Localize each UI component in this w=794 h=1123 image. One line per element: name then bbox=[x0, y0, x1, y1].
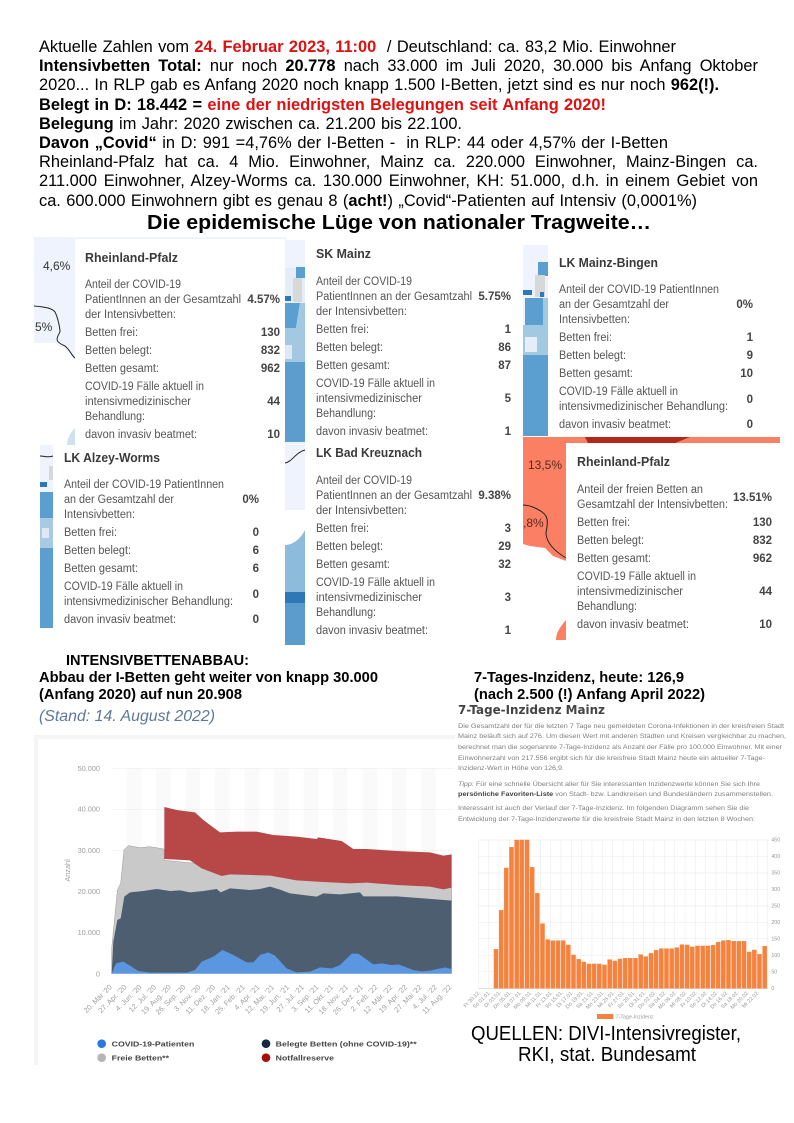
table rows: 1 bbox=[505, 426, 512, 438]
panel heading: Rheinland-Pfalz bbox=[577, 455, 670, 469]
heading: Intensivbettenabbau: Abbau der I-Betten geht weiter von knapp 30.000 bbox=[39, 670, 378, 686]
table rows: 5.75% bbox=[478, 291, 511, 303]
table rows: 29 bbox=[498, 541, 511, 553]
x axis labels: Sa 04.02. bbox=[648, 990, 668, 1010]
intro text block: Aktuelle Zahlen vom 24. Februar 2023, 11:00 / Deutschland: ca. 83,2 Mio. Einwohner bbox=[39, 38, 676, 56]
table rows: Betten frei: bbox=[577, 517, 630, 529]
table rows: 4.57% bbox=[247, 294, 280, 306]
note: status date: (Stand: 14. August 2022) bbox=[39, 708, 215, 725]
table rows: 1 bbox=[505, 625, 512, 637]
x axis labels: Mo 06.02. bbox=[657, 990, 678, 1011]
paragraphs: Tipp: Für eine schnelle Übersicht aller für Sie interessanten Inzidenzwerte können Sie sich Ihre bbox=[458, 781, 761, 788]
table rows: Betten belegt: bbox=[64, 545, 131, 557]
y axis labels: 400 bbox=[771, 854, 780, 860]
table rows: Betten belegt: bbox=[85, 345, 152, 357]
table rows: Betten belegt: bbox=[316, 342, 383, 354]
x axis labels: 19. Jun. '21 bbox=[258, 983, 291, 1016]
table rows: Betten gesamt: bbox=[316, 360, 390, 372]
bars bbox=[494, 840, 767, 988]
table rows: Betten frei: bbox=[64, 527, 117, 539]
x axis labels: 11. Okt. '21 bbox=[303, 983, 335, 1015]
y axis labels: 300 bbox=[771, 887, 780, 893]
y axis labels: 150 bbox=[771, 936, 780, 942]
table rows: davon invasiv beatmet: bbox=[316, 625, 428, 637]
y axis labels bbox=[63, 764, 100, 978]
table rows: Betten frei: bbox=[559, 332, 612, 344]
paragraphs: Entwicklung der 7-Tage-Inzidenzwerte für die kreisfreie Stadt Mainz in den letzten 8 Wochen: bbox=[458, 817, 755, 823]
y axis labels: 450 bbox=[771, 838, 780, 844]
table rows: 1 bbox=[505, 324, 512, 336]
table rows: 10 bbox=[740, 368, 753, 380]
x axis labels: Sa 21.01. bbox=[575, 990, 596, 1010]
heading: 7-Tages-Inzidenz today bbox=[474, 670, 705, 703]
y axis labels: 50.000 bbox=[78, 764, 100, 773]
y axis labels bbox=[771, 838, 780, 992]
table rows: 44 bbox=[759, 586, 773, 598]
panel: Rheinland-Pfalz free beds bbox=[566, 443, 780, 640]
table rows bbox=[316, 475, 512, 637]
table rows: Betten belegt: bbox=[577, 535, 644, 547]
title: Die epidemische Lüge von nationaler Tragweite… bbox=[147, 211, 651, 234]
x axis labels: Mi 08.02. bbox=[669, 990, 689, 1010]
table rows: an der Gesamtzahl der bbox=[559, 299, 669, 311]
intro text block: 211.000 Einwohner, Alzey-Worms ca. 130.000 Einwohner, KH: 51.000, d.h. in einem Gebiet von bbox=[39, 172, 758, 190]
table rows: PatientInnen an der Gesamtzahl bbox=[85, 294, 241, 306]
table rows: Betten gesamt: bbox=[316, 559, 390, 571]
x axis labels: 12. Mai. '21 bbox=[243, 983, 276, 1016]
x axis labels: Sa 07.01. bbox=[503, 990, 523, 1010]
panel heading: LK Mainz-Bingen bbox=[559, 256, 658, 270]
table rows bbox=[85, 279, 281, 441]
intro text block: ca. 600.000 Einwohnern gibt es genau 8 (acht!) „Covid“-Patienten auf Intensiv (0,0001%) bbox=[39, 192, 697, 210]
y axis labels: 0 bbox=[96, 969, 100, 978]
table rows: der Intensivbetten: bbox=[316, 306, 407, 318]
table rows bbox=[64, 479, 259, 626]
table rows: 832 bbox=[261, 345, 280, 357]
series: COVID-19 patients bbox=[112, 950, 452, 974]
table rows: 32 bbox=[498, 559, 511, 571]
x axis labels: 3. Nov. '20 bbox=[172, 983, 202, 1013]
x axis labels: 18. Nov. '21 bbox=[317, 983, 350, 1016]
table rows: 962 bbox=[261, 363, 280, 375]
x axis labels: So 01.01. bbox=[472, 990, 492, 1010]
sources: QUELLEN: DIVI-Intensivregister, bbox=[471, 1023, 741, 1045]
table rows: 962 bbox=[753, 553, 772, 565]
x axis labels: Mi 11.01. bbox=[525, 990, 544, 1009]
panel heading: LK Alzey-Worms bbox=[64, 451, 160, 465]
paragraphs: Einwohnerzahl von 217.556 ergibt sich für die kreisfreie Stadt Mainz heute ein aktueller 7-Tage- bbox=[458, 756, 765, 762]
y axis labels: 200 bbox=[771, 920, 780, 926]
x axis labels: So 29.01. bbox=[617, 990, 637, 1010]
table rows bbox=[577, 484, 773, 631]
y axis labels: 0 bbox=[771, 986, 774, 992]
x axis labels: 12. Mär. '22 bbox=[361, 983, 394, 1016]
heading: 7-Tages-Inzidenz today: (nach 2.500 (!) Anfang April 2022) bbox=[474, 687, 705, 703]
block heading: 7-Tage-Inzidenz Mainz bbox=[458, 702, 605, 717]
table rows: PatientInnen an der Gesamtzahl bbox=[316, 490, 472, 502]
x axis labels: 4. Apr. '21 bbox=[232, 983, 261, 1012]
x axis labels: 27. Jul. '21 bbox=[274, 983, 306, 1014]
table rows: 9 bbox=[747, 350, 753, 362]
table rows: Betten frei: bbox=[316, 523, 369, 535]
table rows: 0 bbox=[747, 394, 753, 406]
table rows: COVID-19 Fälle aktuell in bbox=[85, 381, 204, 393]
table rows: der Intensivbetten: bbox=[316, 505, 407, 517]
table rows: Betten frei: bbox=[85, 327, 138, 339]
x axis labels: Mo 20.02. bbox=[730, 990, 751, 1011]
table rows: Anteil der COVID-19 PatientInnen bbox=[64, 479, 224, 491]
x axis labels: 12. Jul. '20 bbox=[127, 983, 158, 1014]
x axis labels: 27. Apr. '20 bbox=[96, 983, 128, 1015]
y axis labels: Anzahl bbox=[63, 859, 72, 882]
x axis labels: 3. Sep. '21 bbox=[289, 983, 320, 1014]
map fragment: Rheinland-Pfalz pale blue: 5% bbox=[35, 320, 53, 334]
table rows: 130 bbox=[753, 517, 772, 529]
table rows: 0 bbox=[747, 419, 753, 431]
x axis labels: Mo 09.01. bbox=[513, 990, 534, 1011]
x axis labels: Sa 18.02. bbox=[720, 990, 740, 1010]
y axis labels: 250 bbox=[771, 904, 780, 910]
legend: COVID-19-Patienten bbox=[112, 1042, 194, 1049]
x axis labels: Do 02.02. bbox=[637, 990, 658, 1010]
panel: SK Mainz bbox=[305, 240, 522, 440]
legend: Notfallreserve bbox=[276, 1056, 334, 1063]
y axis labels: 10.000 bbox=[78, 928, 100, 937]
table rows bbox=[559, 284, 754, 431]
table rows: Intensivbetten: bbox=[64, 509, 135, 521]
legend bbox=[97, 1039, 417, 1063]
paragraphs: Mainz beläuft sich auf 276. Um diesen Wert mit anderen Städten und Kreisen vergleichbar zu machen, bbox=[458, 734, 786, 740]
background stripes bbox=[126, 768, 436, 974]
x axis labels: 2. Feb. '22 bbox=[349, 983, 379, 1013]
x axis labels: 19. Aug. '20 bbox=[139, 983, 173, 1016]
x axis labels bbox=[82, 983, 453, 1017]
heading: Intensivbettenabbau: (Anfang 2020) auf nun 20.908 bbox=[39, 687, 242, 703]
table rows: 86 bbox=[498, 342, 511, 354]
table rows: davon invasiv beatmet: bbox=[577, 619, 689, 631]
x axis labels: Mi 22.02. bbox=[741, 990, 761, 1010]
chart: ICU beds area chart bbox=[34, 735, 455, 1065]
x axis labels: 20. Mär '20 bbox=[82, 983, 114, 1015]
chart: 7-day incidence bar chart bbox=[463, 838, 780, 1020]
table rows: 130 bbox=[261, 327, 280, 339]
paragraphs bbox=[458, 724, 786, 823]
table rows: Anteil der COVID-19 bbox=[316, 276, 412, 288]
table rows: COVID-19 Fälle aktuell in bbox=[577, 571, 696, 583]
map fragment: Rheinland-Pfalz pale blue: 4,6% bbox=[43, 259, 71, 273]
table rows: Betten belegt: bbox=[559, 350, 626, 362]
table rows: Anteil der COVID-19 bbox=[316, 475, 412, 487]
legend: 7-Tage-Inzidenz bbox=[616, 1014, 654, 1020]
table rows: Anteil der COVID-19 PatientInnen bbox=[559, 284, 719, 296]
x axis labels: Mo 23.01. bbox=[585, 990, 606, 1011]
map fragment: Mainz-Bingen strip bbox=[523, 245, 548, 436]
table rows: intensivmedizinischer bbox=[316, 592, 422, 604]
y axis labels: 40.000 bbox=[78, 805, 100, 814]
table rows: Behandlung: bbox=[316, 607, 376, 619]
x axis labels: Di 17.01. bbox=[556, 990, 575, 1009]
intro text block: Davon „Covid“ in D: 991 =4,76% der I-Betten - in RLP: 44 oder 4,57% der I-Betten bbox=[39, 134, 668, 152]
x axis labels: Fr 27.01. bbox=[607, 990, 627, 1009]
x axis labels: 4. Jul. '22 bbox=[410, 983, 439, 1011]
intro text block: Rheinland-Pfalz hat ca. 4 Mio. Einwohner, Mainz ca. 220.000 Einwohner, Mainz-Bingen ca. bbox=[39, 153, 758, 171]
table rows: intensivmedizinischer bbox=[316, 393, 422, 405]
table rows: 44 bbox=[267, 396, 281, 408]
x axis labels: 26. Sep. '20 bbox=[154, 983, 187, 1017]
x axis labels: So 12.02. bbox=[689, 990, 709, 1010]
series: free beds bbox=[112, 846, 452, 974]
table rows: 6 bbox=[253, 545, 259, 557]
table rows: Behandlung: bbox=[85, 411, 145, 423]
series: emergency reserve bbox=[164, 807, 452, 889]
x axis labels: 19. Apr. '22 bbox=[377, 983, 409, 1015]
table rows: Anteil der COVID-19 bbox=[85, 279, 181, 291]
panel heading: LK Bad Kreuznach bbox=[316, 446, 422, 460]
x axis labels: 11. Aug. '22 bbox=[420, 983, 453, 1016]
table rows: 0% bbox=[242, 494, 259, 506]
heading: Intensivbettenabbau bbox=[39, 653, 378, 703]
map fragment: SK Mainz / Bad Kreuznach strip bbox=[285, 240, 305, 645]
table rows: COVID-19 Fälle aktuell in bbox=[316, 577, 435, 589]
intro text block: Intensivbetten Total: nur noch 20.778 nach 33.000 im Juli 2020, 30.000 bis Anfang Oktober bbox=[39, 57, 758, 75]
x axis labels: Mi 25.01. bbox=[597, 990, 616, 1010]
table rows: intensivmedizinischer Behandlung: bbox=[64, 596, 233, 608]
map fragment: free beds salmon: 13,5% bbox=[528, 458, 562, 472]
heading: Intensivbettenabbau: INTENSIVBETTENABBAU: bbox=[66, 653, 249, 669]
x axis labels: 27. Mai '22 bbox=[392, 983, 424, 1014]
x axis labels: Di 31.01. bbox=[628, 990, 647, 1009]
table rows: 832 bbox=[753, 535, 772, 547]
table rows: PatientInnen an der Gesamtzahl bbox=[316, 291, 472, 303]
table rows: Gesamtzahl der Intensivbetten: bbox=[577, 499, 728, 511]
panel heading: SK Mainz bbox=[316, 247, 371, 261]
table rows: 13.51% bbox=[733, 492, 772, 504]
x axis labels: Fr 13.01. bbox=[535, 990, 554, 1009]
table rows bbox=[316, 276, 512, 438]
table rows: davon invasiv beatmet: bbox=[85, 429, 197, 441]
table rows: 10 bbox=[759, 619, 772, 631]
table rows: 6 bbox=[253, 563, 259, 575]
grid lines bbox=[112, 768, 453, 932]
table rows: 10 bbox=[267, 429, 280, 441]
y axis labels: 20.000 bbox=[78, 887, 100, 896]
legend: Freie Betten** bbox=[112, 1056, 169, 1063]
table rows: 0 bbox=[253, 614, 259, 626]
x axis labels: 25. Feb. '21 bbox=[213, 983, 247, 1016]
sources bbox=[471, 1023, 741, 1066]
x axis labels: 26. Dez. '21 bbox=[331, 983, 365, 1017]
x axis labels: 18. Jan. '21 bbox=[199, 983, 232, 1016]
x axis labels: Di 14.02. bbox=[700, 990, 720, 1009]
table rows: davon invasiv beatmet: bbox=[316, 426, 428, 438]
table rows: 5 bbox=[505, 393, 512, 405]
x axis labels: Fr 10.02. bbox=[680, 990, 699, 1009]
table rows: Behandlung: bbox=[316, 408, 376, 420]
table rows: Intensivbetten: bbox=[559, 314, 630, 326]
legend: Belegte Betten (ohne COVID-19)** bbox=[276, 1042, 417, 1049]
x axis labels: Do 19.01. bbox=[565, 990, 585, 1010]
y axis labels: 50 bbox=[771, 969, 777, 975]
table rows: Betten belegt: bbox=[316, 541, 383, 553]
intro text block: 2020... In RLP gab es Anfang 2020 noch knapp 1.500 I-Betten, jetzt sind es nur noch 962(!). bbox=[39, 76, 719, 94]
table rows: 0 bbox=[253, 589, 259, 601]
table rows: davon invasiv beatmet: bbox=[64, 614, 176, 626]
y axis labels: 30.000 bbox=[78, 846, 100, 855]
table rows: der Intensivbetten: bbox=[85, 309, 176, 321]
x axis labels: Do 05.01. bbox=[492, 990, 513, 1010]
sources: RKI, stat. Bundesamt bbox=[518, 1044, 696, 1066]
paragraphs: Interessant ist auch der Verlauf der 7-Tage-Inzidenz. Im folgenden Diagramm sehen Sie die bbox=[458, 806, 750, 812]
x axis labels: 11. Dez. '20 bbox=[184, 983, 217, 1016]
panel heading: Rheinland-Pfalz bbox=[85, 251, 178, 265]
y axis labels: 100 bbox=[771, 953, 780, 959]
axis line bbox=[478, 987, 768, 989]
table rows: Betten gesamt: bbox=[64, 563, 138, 575]
map fragment: Alzey-Worms strip bbox=[40, 445, 53, 628]
paragraphs: Inzidenz-Wert in Höhe von 126,9. bbox=[458, 766, 564, 772]
paragraphs: persönliche Favoriten-Liste von Stadt- bzw. Landkreisen und Bundesländern zusammenstellen. bbox=[458, 792, 773, 798]
map fragment: Rheinland-Pfalz pale blue bbox=[34, 237, 286, 445]
table rows: COVID-19 Fälle aktuell in bbox=[64, 581, 183, 593]
x axis labels: Di 03.01. bbox=[483, 990, 503, 1009]
map fragment: free beds salmon: ,8% bbox=[523, 516, 544, 530]
table rows: Betten gesamt: bbox=[85, 363, 159, 375]
map fragment: free beds salmon bbox=[523, 437, 780, 640]
table rows: COVID-19 Fälle aktuell in bbox=[316, 378, 435, 390]
table rows: Anteil der freien Betten an bbox=[577, 484, 703, 496]
panel: LK Bad Kreuznach bbox=[305, 440, 522, 645]
y axis labels: 350 bbox=[771, 871, 780, 877]
table rows: Betten gesamt: bbox=[559, 368, 633, 380]
table rows: 9.38% bbox=[478, 490, 511, 502]
table rows: 87 bbox=[498, 360, 511, 372]
paragraphs: berechnet man die sogenannte 7-Tage-Inzidenz als Anzahl der Fälle pro 100.000 Einwohner. Mit einer bbox=[458, 745, 782, 751]
table rows: COVID-19 Fälle aktuell in bbox=[559, 386, 678, 398]
intro text block: Belegung im Jahr: 2020 zwischen ca. 21.200 bis 22.100. bbox=[39, 115, 462, 133]
legend bbox=[597, 1014, 654, 1020]
paragraphs: Die Gesamtzahl der für die letzten 7 Tage neu gemeldeten Corona-Infektionen in der kreisfreien Stadt bbox=[458, 724, 784, 730]
table rows: davon invasiv beatmet: bbox=[559, 419, 671, 431]
panel: LK Alzey-Worms bbox=[53, 445, 285, 628]
text block: 7-Tage-Inzidenz Mainz bbox=[458, 702, 786, 823]
panel: LK Mainz-Bingen bbox=[548, 245, 763, 436]
x axis labels: Do 16.02. bbox=[709, 990, 730, 1010]
table rows: 1 bbox=[747, 332, 754, 344]
table rows: 3 bbox=[505, 592, 511, 604]
table rows: Betten frei: bbox=[316, 324, 369, 336]
table rows: intensivmedizinischer bbox=[577, 586, 683, 598]
table rows: 3 bbox=[505, 523, 511, 535]
x axis labels: So 15.01. bbox=[544, 990, 565, 1010]
x axis labels: 4. Jun. '20 bbox=[113, 983, 143, 1013]
table rows: Behandlung: bbox=[577, 601, 637, 613]
panel: Rheinland-Pfalz ICU share bbox=[75, 239, 285, 445]
grid lines bbox=[478, 840, 768, 988]
table rows: 0% bbox=[736, 299, 753, 311]
series: occupied beds bbox=[112, 887, 452, 974]
table rows: 0 bbox=[253, 527, 259, 539]
heading: 7-Tages-Inzidenz today: 7-Tages-Inzidenz, heute: 126,9 bbox=[474, 670, 684, 686]
table rows: intensivmedizinischer bbox=[85, 396, 191, 408]
x axis labels: Fr 30.12. bbox=[463, 990, 482, 1009]
table rows: intensivmedizinischer Behandlung: bbox=[559, 401, 728, 413]
intro text block: Belegt in D: 18.442 = eine der niedrigsten Belegungen seit Anfang 2020! bbox=[39, 96, 606, 114]
intro text block bbox=[39, 38, 758, 210]
x axis labels bbox=[463, 990, 761, 1011]
table rows: Betten gesamt: bbox=[577, 553, 651, 565]
table rows: an der Gesamtzahl der bbox=[64, 494, 174, 506]
